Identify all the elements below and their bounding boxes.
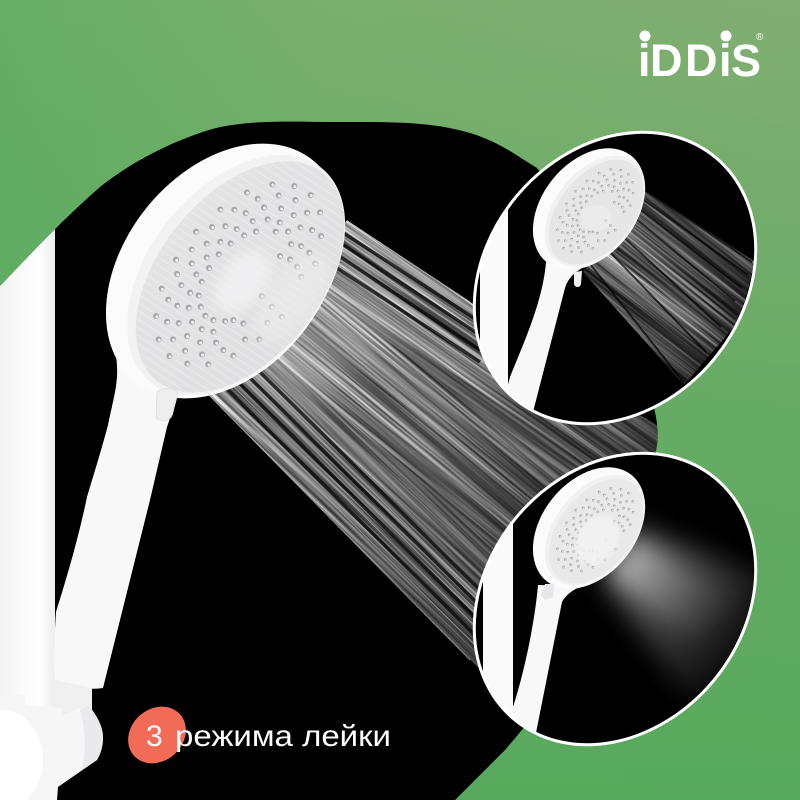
- inset: mist mode: [472, 452, 758, 746]
- main shower head: [106, 144, 346, 398]
- inset handle: [513, 585, 578, 732]
- caption text: 3: [146, 720, 163, 753]
- inset head: [532, 467, 646, 588]
- spray face with nozzles: [136, 162, 344, 392]
- inset button: [541, 584, 554, 600]
- outer spray jets: [206, 221, 480, 660]
- registered mark: ®: [756, 32, 764, 43]
- inset nozzles: [549, 160, 643, 264]
- main mode button: [156, 389, 178, 421]
- inset head: [532, 148, 646, 268]
- caption: 3 shower modes: [117, 695, 391, 775]
- inset nozzles: [556, 487, 635, 572]
- wall bracket: [0, 680, 103, 800]
- caption: 3 shower modes: режима лейки: [175, 720, 391, 753]
- dark gaps at spray edges: [216, 232, 480, 640]
- inset: wide-spray mode: [472, 130, 758, 426]
- inset rail: [480, 207, 508, 393]
- main shower handle: [54, 320, 200, 689]
- logo: IDDIS: iDDiS: [638, 35, 761, 86]
- main water spray: [208, 220, 658, 668]
- inset rail: [483, 522, 513, 717]
- inset handle: [506, 262, 582, 412]
- coral number badge: [117, 695, 197, 775]
- inset water spray: [583, 190, 754, 385]
- inset button: [574, 271, 582, 287]
- main shower rail: [0, 200, 55, 730]
- mist cone: [602, 528, 765, 700]
- black rounded backdrop: [0, 122, 658, 800]
